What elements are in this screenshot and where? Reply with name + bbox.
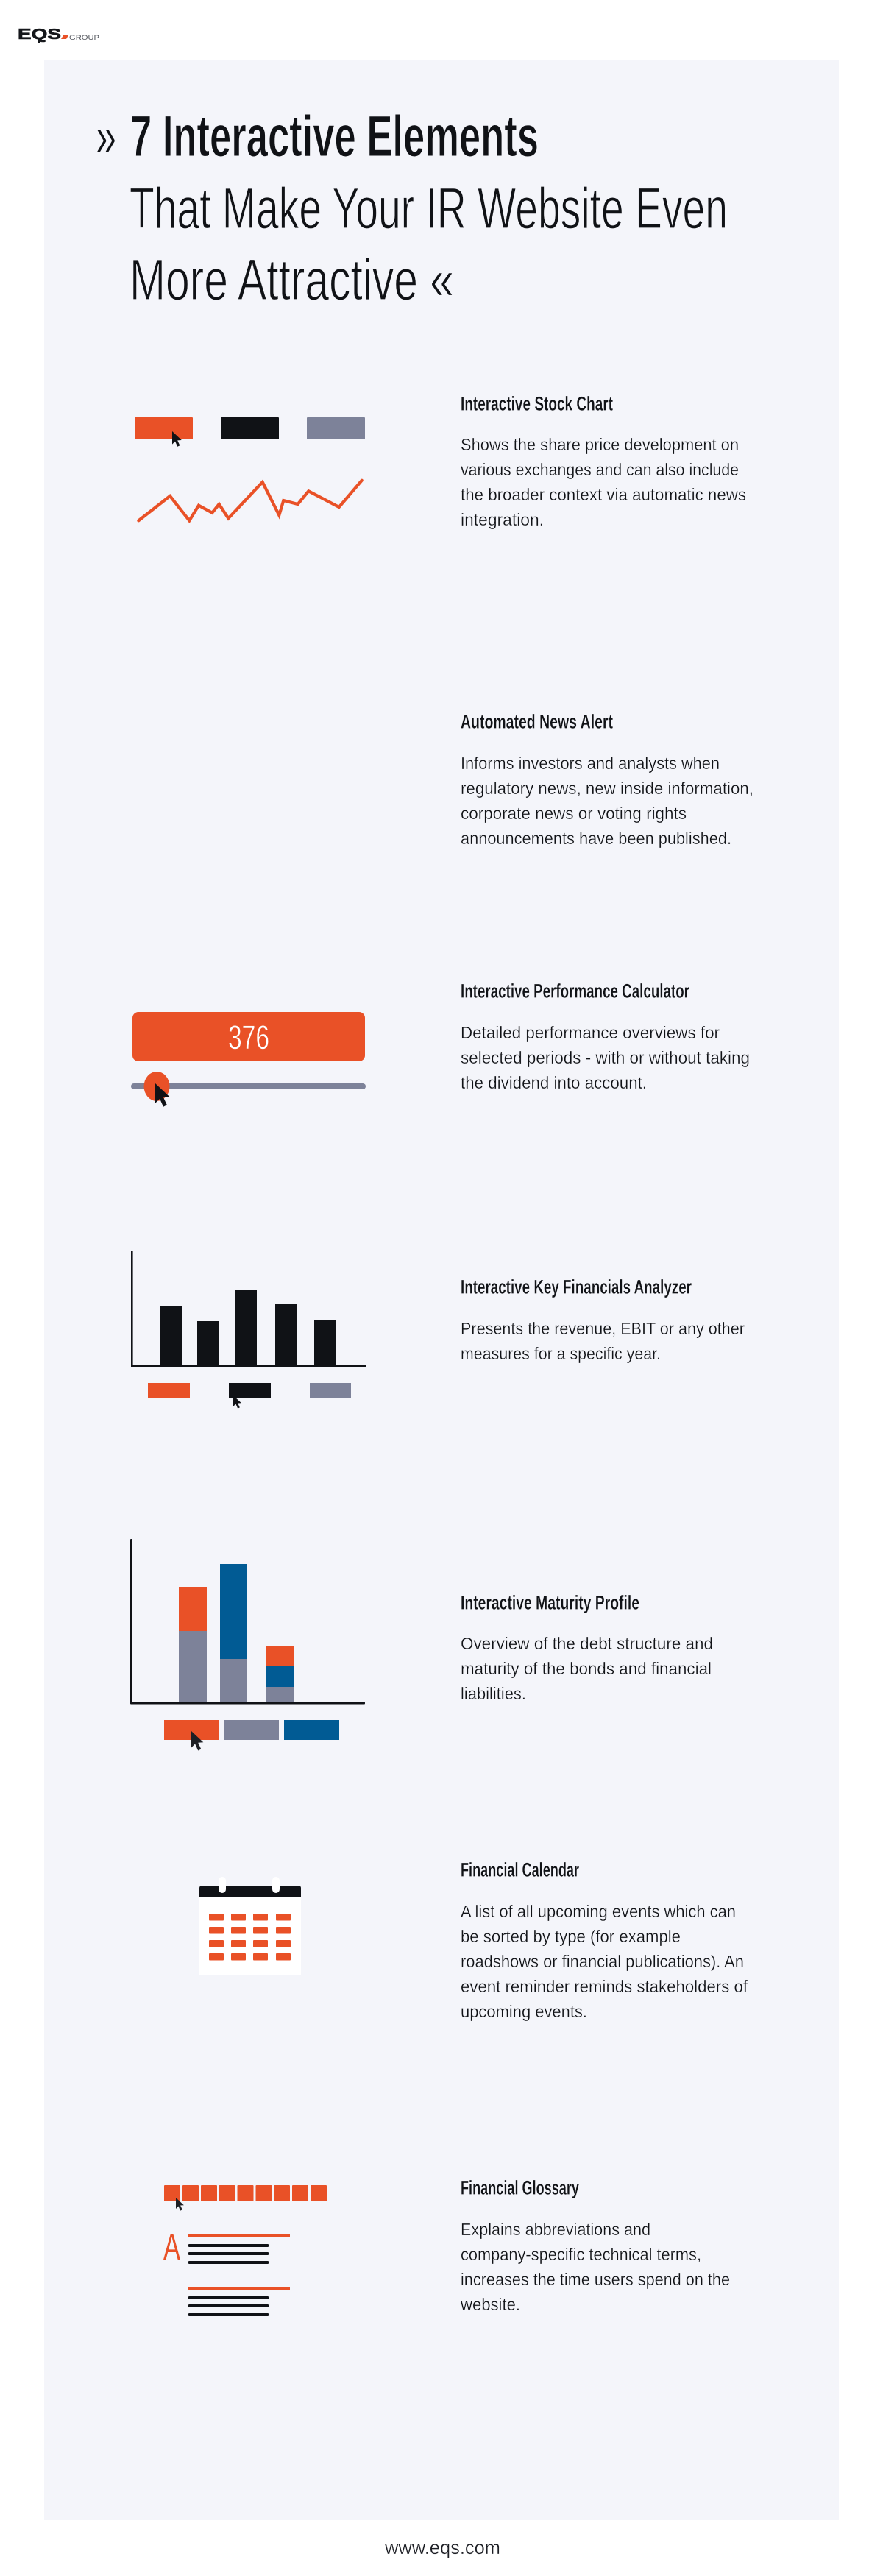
text: stock chart description: integration. (461, 510, 544, 529)
logo: EQS Group: EQS (18, 26, 61, 43)
icon: stock chart with buttons (135, 417, 365, 520)
heading: Interactive Key Financials Analyzer: Interactive Key Financials Analyzer (461, 1276, 692, 1298)
icon: glossary: A (163, 2226, 180, 2268)
text: calculator description: the dividend into account. (461, 1073, 647, 1092)
text: calculator description: Detailed performance overviews for (461, 1023, 720, 1042)
text: news alert description: announcements have been published. (461, 829, 731, 848)
text: key financials description: measures for a specific year. (461, 1344, 661, 1363)
section: automated news alert (461, 711, 753, 848)
text: stock chart description: Shows the share price development on (461, 435, 739, 454)
icon: calendar (199, 1877, 301, 1975)
icon: calculator with slider: 376 (228, 1019, 269, 1056)
section: interactive maturity profile (130, 1539, 713, 1751)
title: 7 Interactive Elements (130, 103, 539, 169)
text: glossary description: Explains abbreviations and (461, 2220, 650, 2239)
text: key financials description: Presents the revenue, EBIT or any other (461, 1319, 745, 1338)
text: calculator description: selected periods - with or without taking (461, 1048, 750, 1067)
text: maturity profile description: maturity of the bonds and financial (461, 1659, 712, 1678)
text: glossary description: increases the time users spend on the (461, 2270, 730, 2289)
text: key financials description (461, 1319, 745, 1363)
text: maturity profile description: Overview of the debt structure and (461, 1634, 713, 1653)
text: calculator description (461, 1023, 750, 1092)
text: calendar description (461, 1902, 748, 2021)
text: calendar description: upcoming events. (461, 2002, 587, 2021)
section: interactive performance calculator (131, 980, 750, 1107)
section: interactive stock chart (135, 393, 746, 529)
title (96, 103, 728, 312)
logo: EQS Group: GROUP (69, 34, 99, 41)
text: glossary description: website. (460, 2295, 520, 2314)
title: » (96, 103, 116, 169)
text: calendar description: event reminder reminds stakeholders of (461, 1977, 748, 1996)
text: calendar description: roadshows or financial publications). An (461, 1952, 744, 1971)
title: More Attractive « (130, 247, 454, 312)
icon: calculator with slider (131, 1012, 366, 1107)
section: financial calendar (199, 1859, 748, 2021)
chart: key financials bars (131, 1251, 366, 1409)
text: calendar description: A list of all upcoming events which can (461, 1902, 736, 1921)
text: glossary description: company-specific technical terms, (461, 2245, 701, 2264)
text: stock chart description: the broader context via automatic news (461, 485, 746, 504)
text: news alert description: regulatory news, new inside information, (461, 779, 753, 798)
icon: glossary (163, 2185, 327, 2316)
text: news alert description (461, 754, 753, 848)
text: maturity profile description: liabilities. (461, 1684, 526, 1703)
text: stock chart description (461, 435, 746, 529)
text: maturity profile description (461, 1634, 713, 1703)
section: interactive key financials analyzer (131, 1251, 745, 1409)
text: news alert description: corporate news or voting rights (461, 804, 687, 823)
heading: Financial Glossary: Financial Glossary (461, 2177, 579, 2199)
text: news alert description: Informs investors and analysts when (461, 754, 720, 773)
footer: website URL: www.eqs.com (384, 2536, 500, 2558)
section: financial glossary (163, 2177, 730, 2316)
heading: Financial Calendar: Financial Calendar (461, 1859, 579, 1881)
logo: EQS Group (18, 26, 99, 43)
text: calendar description: be sorted by type (for example (461, 1927, 681, 1946)
chart: maturity stacked bars (130, 1539, 365, 1751)
text: stock chart description: various exchanges and can also include (461, 460, 739, 479)
text: glossary description (460, 2220, 730, 2314)
heading: Interactive Maturity Profile: Interactive Maturity Profile (461, 1591, 639, 1613)
heading: Interactive Stock Chart: Interactive Stock Chart (461, 393, 613, 415)
heading: Interactive Performance Calculator: Interactive Performance Calculator (461, 980, 689, 1002)
heading: Automated News Alert: Automated News Alert (461, 711, 613, 733)
